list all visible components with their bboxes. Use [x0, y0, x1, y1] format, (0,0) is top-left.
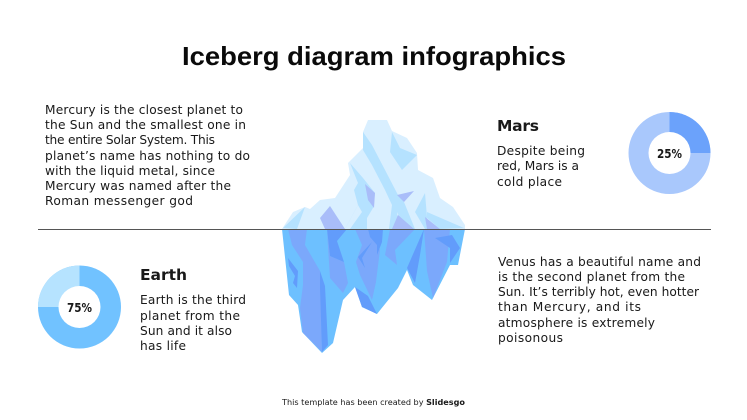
- heading: Mars: Mars: [497, 117, 539, 135]
- text block: Venus: Sun. It’s terribly hot, even hotter: [498, 285, 700, 299]
- iceberg diagram: [282, 120, 465, 353]
- text block: Venus: poisonous: [498, 331, 563, 345]
- heading: Earth: Earth: [140, 266, 187, 284]
- text block: Mars: Despite being: [497, 144, 585, 158]
- text block: Mercury: with the liquid metal, since: [45, 164, 215, 178]
- text block: Earth: Sun and it also: [140, 324, 232, 338]
- donut chart: 25%: 25%: [657, 147, 682, 161]
- donut chart: 25%: [628, 112, 710, 194]
- text block: Venus: atmosphere is extremely: [498, 316, 655, 330]
- text block: Earth: [140, 293, 246, 353]
- text block: Mercury: the Sun and the smallest one in: [45, 118, 246, 132]
- text block: Venus: Venus has a beautiful name and: [498, 255, 701, 269]
- text block: Mars: cold place: [497, 175, 562, 189]
- text block: Mercury: Roman messenger god: [45, 194, 193, 208]
- title: Iceberg diagram infographics: [182, 41, 566, 71]
- text block: Mercury: Mercury is the closest planet to: [45, 103, 243, 117]
- text block: Mercury: planet’s name has nothing to do: [45, 149, 250, 163]
- text block: Mars: red, Mars is a: [497, 159, 579, 173]
- text block: Venus: [498, 255, 701, 345]
- waterline: [38, 228, 711, 230]
- text block: Venus: is the second planet from the: [498, 270, 685, 284]
- text block: Mars: [497, 144, 585, 189]
- text block: Earth: Earth is the third: [140, 293, 246, 307]
- iceberg above water: [282, 120, 465, 229]
- text block: Mercury: Mercury was named after the: [45, 179, 231, 193]
- text block: Mercury: the entire Solar System. This: [45, 133, 215, 147]
- text block: Mercury: [45, 103, 250, 208]
- donut chart: 75%: [38, 266, 121, 348]
- donut chart: 75%: 75%: [67, 301, 92, 315]
- text block: Earth: planet from the: [140, 309, 240, 323]
- text block: Venus: than Mercury, and its: [498, 300, 641, 314]
- text block: Earth: has life: [140, 339, 186, 353]
- iceberg below water: [282, 229, 465, 353]
- footer credit: This template has been created by Slidesgo: [281, 398, 466, 407]
